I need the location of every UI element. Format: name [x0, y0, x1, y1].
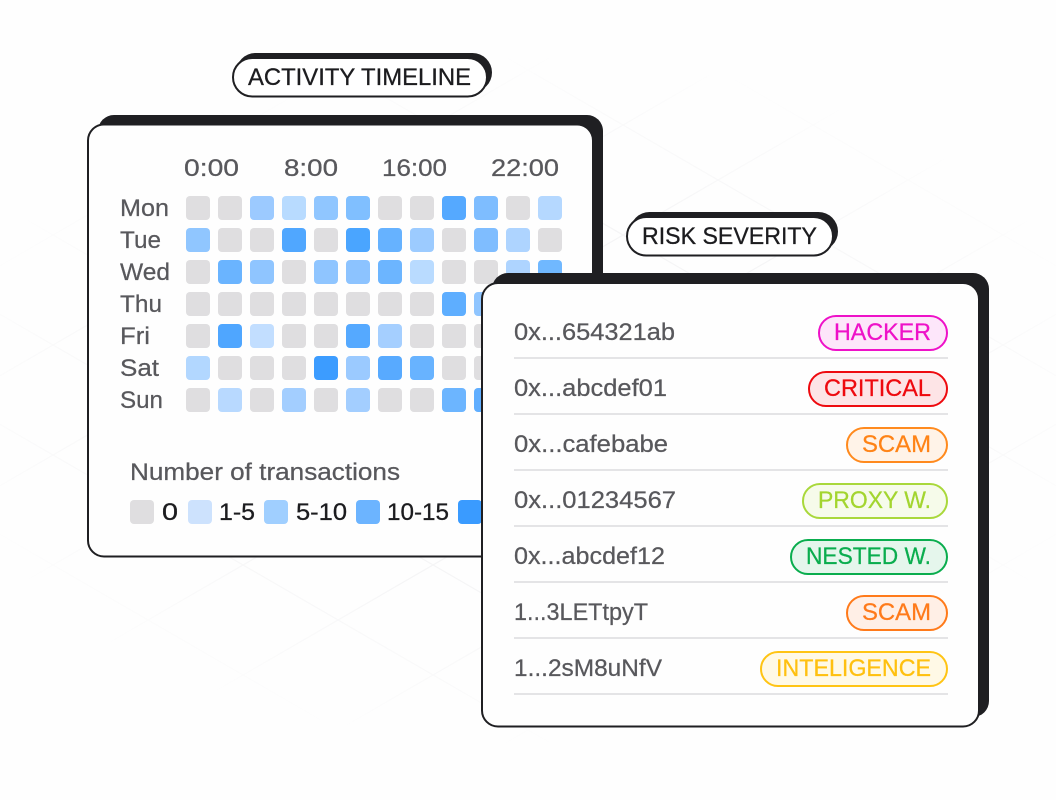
row: Thu [186, 292, 498, 316]
row: Sat [186, 356, 498, 380]
row: 0x...abcdef01 critical [514, 372, 948, 415]
day labels: Fri [120, 323, 150, 350]
row: 1...3LETtpyT scam: SCAM [862, 599, 931, 626]
time axis labels: 0:00 [184, 155, 239, 182]
row: Mon [186, 196, 562, 220]
row: 1...2sM8uNfV intelligence: 1...2sM8uNfV [514, 655, 662, 682]
row: Wed [186, 260, 562, 284]
row: 0x...654321ab hacker [514, 316, 948, 359]
row: Tue [186, 228, 562, 252]
row: 0x...abcdef12 nested wallet [514, 540, 948, 583]
time axis labels: 22:00 [491, 155, 559, 182]
row: Sun [186, 388, 498, 412]
day labels: Sun [120, 387, 163, 414]
legend: 10-15 [387, 499, 449, 526]
row: 0x...abcdef01 critical: 0x...abcdef01 [514, 375, 667, 402]
row: 0x...abcdef01 critical: CRITICAL [824, 375, 931, 402]
row: 1...2sM8uNfV intelligence: INTELIGENCE [776, 655, 931, 682]
row: 0x...cafebabe scam [514, 428, 948, 471]
time axis labels [184, 155, 559, 182]
row: 0x...654321ab hacker: 0x...654321ab [514, 319, 675, 346]
legend: 1-5 [219, 499, 255, 526]
day labels: Mon [120, 195, 169, 222]
row: 0x...01234567 proxy wallet: PROXY W. [818, 487, 931, 514]
panel: risk severity [482, 273, 989, 726]
heatmap grid [186, 196, 562, 412]
row: 1...2sM8uNfV intelligence [514, 652, 948, 695]
legend: 5-10 [296, 499, 347, 526]
legend [130, 499, 482, 526]
row: 0x...654321ab hacker: HACKER [834, 319, 931, 346]
day labels [120, 195, 170, 414]
row: 0x...01234567 proxy wallet: 0x...01234567 [514, 487, 676, 514]
row: 0x...abcdef12 nested wallet: 0x...abcdef12 [514, 543, 665, 570]
row: Fri [186, 324, 498, 348]
legend: 0 [162, 499, 178, 526]
heading: risk severity: RISK SEVERITY [642, 223, 817, 250]
row: 1...3LETtpyT scam: 1...3LETtpyT [514, 599, 648, 626]
row: 0x...01234567 proxy wallet [514, 484, 948, 527]
legend title: Number of transactions [130, 459, 400, 486]
heading: activity timeline: ACTIVITY TIMELINE [248, 64, 471, 91]
day labels: Tue [120, 227, 161, 254]
heading: risk severity [627, 212, 838, 256]
row: 1...3LETtpyT scam [514, 596, 948, 639]
day labels: Thu [120, 291, 162, 318]
heading: activity timeline [233, 53, 492, 96]
row: 0x...cafebabe scam: SCAM [862, 431, 931, 458]
time axis labels: 16:00 [382, 155, 447, 182]
day labels: Wed [120, 259, 170, 286]
day labels: Sat [120, 355, 159, 382]
panel: activity timeline [88, 115, 603, 556]
row: 0x...abcdef12 nested wallet: NESTED W. [806, 543, 931, 570]
row: 0x...cafebabe scam: 0x...cafebabe [514, 431, 668, 458]
time axis labels: 8:00 [284, 155, 338, 182]
